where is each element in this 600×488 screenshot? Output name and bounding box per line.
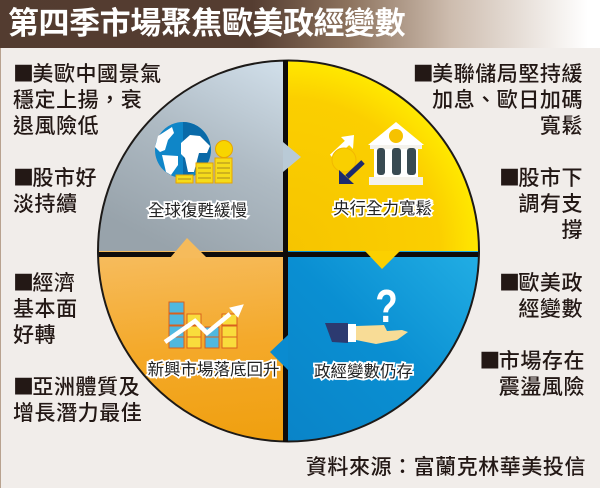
- text block: stocks bullet right: 撐: [561, 214, 583, 244]
- label: emerging markets: 新興市場落底回升: [148, 360, 280, 379]
- text block: stocks bullet right: 調有支: [518, 188, 583, 218]
- text block: Europe US politics bullet: 經變數: [518, 293, 583, 323]
- text block: stocks bullet left: ■股市好: [13, 162, 97, 192]
- text block: stocks bullet right: [499, 162, 583, 244]
- text block: market volatility bullet: ■市場存在: [479, 345, 585, 375]
- arrow: yellow to blue: [365, 251, 400, 269]
- text block: Fed bullet: 加息、歐日加碼: [432, 84, 583, 114]
- arrow: orange to grey: [170, 238, 207, 258]
- quadrant: blue: [285, 251, 479, 442]
- text block: Europe US politics bullet: ■歐美政: [499, 267, 583, 297]
- arrow: grey to yellow: [283, 142, 301, 172]
- text block: stocks bullet right: ■股市下: [499, 162, 583, 192]
- label: political uncertainty: 政經變數仍存: [314, 362, 413, 381]
- cross dividers: [99, 60, 478, 442]
- text block: Asia bullet: ■亞洲體質及: [13, 371, 140, 401]
- icon: hand and question mark: [325, 280, 408, 344]
- text block: Asia bullet: 增長潛力最佳: [13, 397, 142, 427]
- icon: bank and arrows: [332, 122, 424, 185]
- text block: Asia bullet: [13, 371, 142, 427]
- label: global recovery: 全球復甦緩慢: [148, 201, 248, 220]
- text block: global outlook bullet: [13, 58, 162, 140]
- text block: stocks bullet left: [13, 162, 97, 218]
- text block: market volatility bullet: [479, 345, 585, 401]
- quadrant: orange: [98, 251, 285, 442]
- text block: global outlook bullet: 穩定上揚，衰: [13, 84, 142, 114]
- text block: global outlook bullet: ■美歐中國景氣: [13, 58, 162, 88]
- text block: stocks bullet left: 淡持續: [13, 188, 78, 218]
- arrow: blue to orange: [270, 335, 288, 370]
- quadrant: grey: [98, 60, 285, 251]
- icon: hand and question mark: ?: [375, 280, 398, 332]
- text block: global outlook bullet: 退風險低: [13, 110, 99, 140]
- text block: source: 資料來源：富蘭克林華美投信: [306, 451, 586, 481]
- icon: rising bar chart: [165, 302, 243, 348]
- text block: economy bullet: 好轉: [13, 319, 56, 349]
- text block: Fed bullet: ■美聯儲局堅持緩: [413, 58, 583, 88]
- icon: globe and coins: [155, 122, 232, 183]
- title banner: [0, 0, 600, 48]
- title banner: 第四季市場聚焦歐美政經變數: [8, 6, 405, 41]
- text block: Europe US politics bullet: [499, 267, 583, 323]
- circle outline: [98, 60, 479, 442]
- text block: Fed bullet: [413, 58, 583, 140]
- quadrant: yellow: [285, 60, 479, 251]
- text block: economy bullet: [13, 267, 78, 349]
- text block: economy bullet: ■經濟: [13, 267, 76, 297]
- text block: economy bullet: 基本面: [13, 293, 78, 323]
- label: central banks easing: 央行全力寬鬆: [333, 199, 432, 218]
- text block: market volatility bullet: 震盪風險: [499, 371, 585, 401]
- text block: Fed bullet: 寬鬆: [540, 110, 583, 140]
